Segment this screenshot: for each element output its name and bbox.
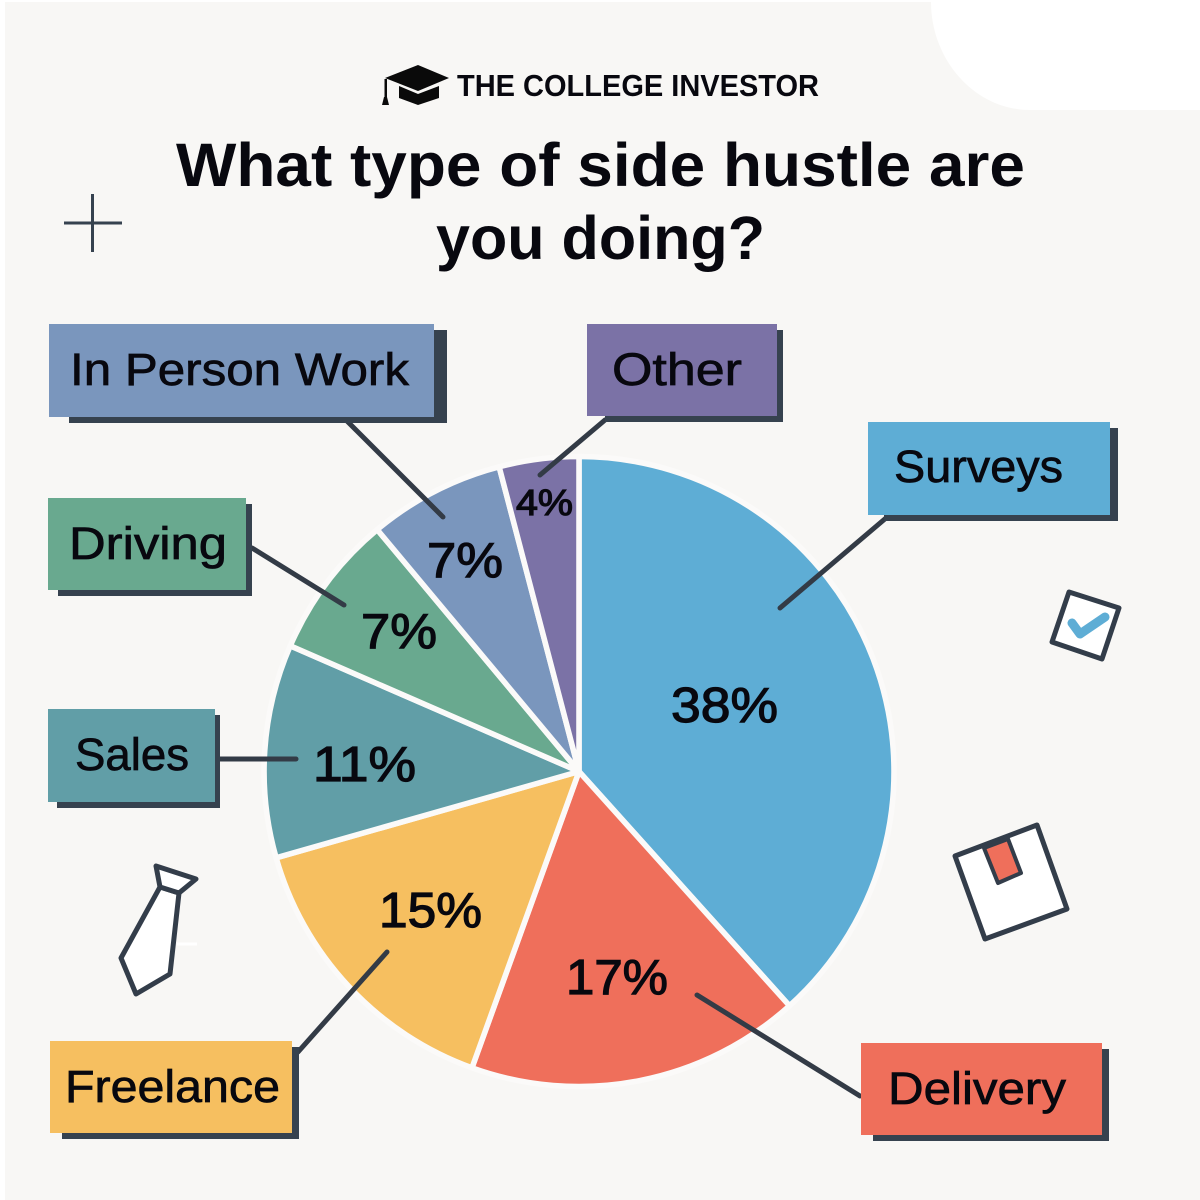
label: freelance: Freelance <box>65 1061 280 1112</box>
leader line: freelance <box>298 952 387 1052</box>
label: other <box>587 324 783 422</box>
slice: surveys 38% <box>579 457 894 1006</box>
logo: The College Investor <box>382 65 819 105</box>
label: delivery: Delivery <box>888 1063 1067 1114</box>
percent value: 17%: 17% <box>566 951 668 1005</box>
leader line: in person work <box>347 421 443 517</box>
percent value: 7% in person work: 7% <box>427 534 503 588</box>
logo wordmark: THE COLLEGE INVESTOR <box>457 68 819 103</box>
label: surveys <box>868 422 1118 521</box>
label: driving <box>48 498 252 596</box>
label: driving: Driving <box>69 518 227 569</box>
label: other: Other <box>612 344 742 395</box>
slice: other 4% <box>499 457 579 772</box>
label: in person work <box>49 324 447 423</box>
leader line: other <box>540 420 605 475</box>
label: surveys: Surveys <box>894 441 1063 492</box>
leader line: surveys <box>780 518 886 608</box>
title <box>176 131 1025 272</box>
icon: checkbox <box>1052 592 1119 659</box>
percent value: 7% driving: 7% <box>361 605 437 659</box>
slice: driving 7% <box>290 530 579 772</box>
leader line: driving <box>252 548 344 605</box>
slice: delivery 17% <box>472 772 790 1087</box>
label: in person work: In Person Work <box>70 344 410 395</box>
percent value: 11%: 11% <box>313 738 416 792</box>
title: What type of side hustle are <box>176 131 1025 199</box>
pie chart <box>264 457 894 1087</box>
slice: in person work 7% <box>377 467 579 772</box>
icon: plus sign <box>64 194 122 252</box>
slice: freelance 15% <box>276 772 579 1068</box>
icon: graduation cap <box>382 65 449 105</box>
title: you doing? <box>436 204 765 272</box>
leader line: delivery <box>697 995 860 1096</box>
label: sales: Sales <box>75 729 189 780</box>
percent value: 4%: 4% <box>516 482 573 523</box>
icon: necktie <box>121 866 197 994</box>
label: freelance <box>50 1041 299 1139</box>
label: sales <box>48 709 220 808</box>
percent value: 38%: 38% <box>671 679 778 733</box>
label: delivery <box>861 1043 1109 1141</box>
slice: sales 11% <box>264 646 579 858</box>
icon: package box <box>955 825 1067 939</box>
percent value: 15%: 15% <box>379 884 482 938</box>
leader line: sales <box>218 756 296 762</box>
